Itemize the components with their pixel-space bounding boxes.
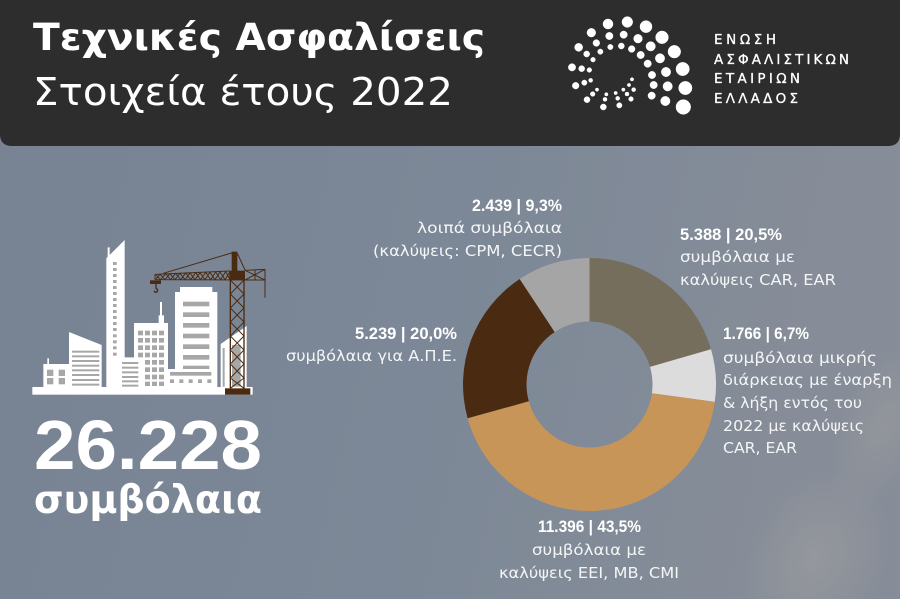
label: RES contracts [286, 325, 457, 365]
donut chart [463, 258, 716, 511]
label: other contracts: 2.439 | 9,3% [472, 197, 562, 215]
label: RES contracts: συμβόλαια για Α.Π.Ε. [286, 347, 457, 365]
label: CAR, EAR contracts: 5.388 | 20,5% [680, 226, 782, 244]
label: CAR, EAR contracts: συμβόλαια με [680, 248, 795, 266]
windows [47, 262, 241, 387]
label: CAR, EAR contracts: καλύψεις CAR, EAR [680, 271, 836, 289]
logo wordmark: ΑΣΦΑΛΙΣΤΙΚΩΝ [714, 52, 849, 68]
logo wordmark: ΕΝΩΣΗ [714, 32, 776, 48]
slice: other 9.3% [520, 258, 590, 332]
label: other contracts [373, 197, 562, 260]
label: other contracts: λοιπά συμβόλαια [417, 219, 562, 237]
title: Τεχνικές Ασφαλίσεις [33, 16, 485, 59]
label: EEI, MB, CMI contracts: συμβόλαια με [532, 541, 646, 559]
logo wordmark [714, 32, 849, 107]
slice: CAR, EAR 20.5% [590, 258, 711, 367]
label: EEI, MB, CMI contracts [499, 518, 679, 582]
slice: RES 20.0% [463, 279, 555, 418]
label: short duration contracts: συμβόλαια μικρής [723, 349, 877, 367]
label: short duration contracts: 1.766 | 6,7% [723, 325, 809, 343]
icon: city skyline with crane [32, 240, 265, 395]
label: short duration contracts: διάρκειας με έναρξη [723, 371, 892, 389]
title [33, 16, 485, 114]
label: short duration contracts: & λήξη εντός του [723, 394, 862, 412]
icon: dotted arc logo mark [568, 17, 692, 114]
total contracts figure [34, 406, 262, 523]
slice: short duration 6.7% [650, 349, 716, 402]
title: Στοιχεία έτους 2022 [33, 70, 453, 114]
buildings [32, 240, 253, 395]
slice: EEI, MB, CMI 43.5% [468, 393, 715, 511]
logo wordmark: ΕΤΑΙΡΙΩΝ [714, 71, 800, 87]
label: short duration contracts [723, 325, 892, 457]
crane [154, 253, 265, 388]
label: EEI, MB, CMI contracts: καλύψεις EEI, MB, CMI [499, 564, 679, 582]
label: CAR, EAR contracts [680, 226, 836, 289]
total contracts figure: συμβόλαια [34, 478, 262, 523]
header band [0, 0, 900, 146]
logo [568, 17, 849, 114]
label: short duration contracts: 2022 με καλύψεις [723, 417, 864, 435]
logo wordmark: ΕΛΛΑΔΟΣ [714, 91, 798, 107]
label: short duration contracts: CAR, EAR [723, 439, 797, 457]
label: EEI, MB, CMI contracts: 11.396 | 43,5% [538, 518, 641, 536]
label: other contracts: (καλύψεις: CPM, CECR) [373, 242, 562, 260]
label: RES contracts: 5.239 | 20,0% [355, 325, 457, 343]
total contracts figure: 26.228 [34, 406, 262, 484]
